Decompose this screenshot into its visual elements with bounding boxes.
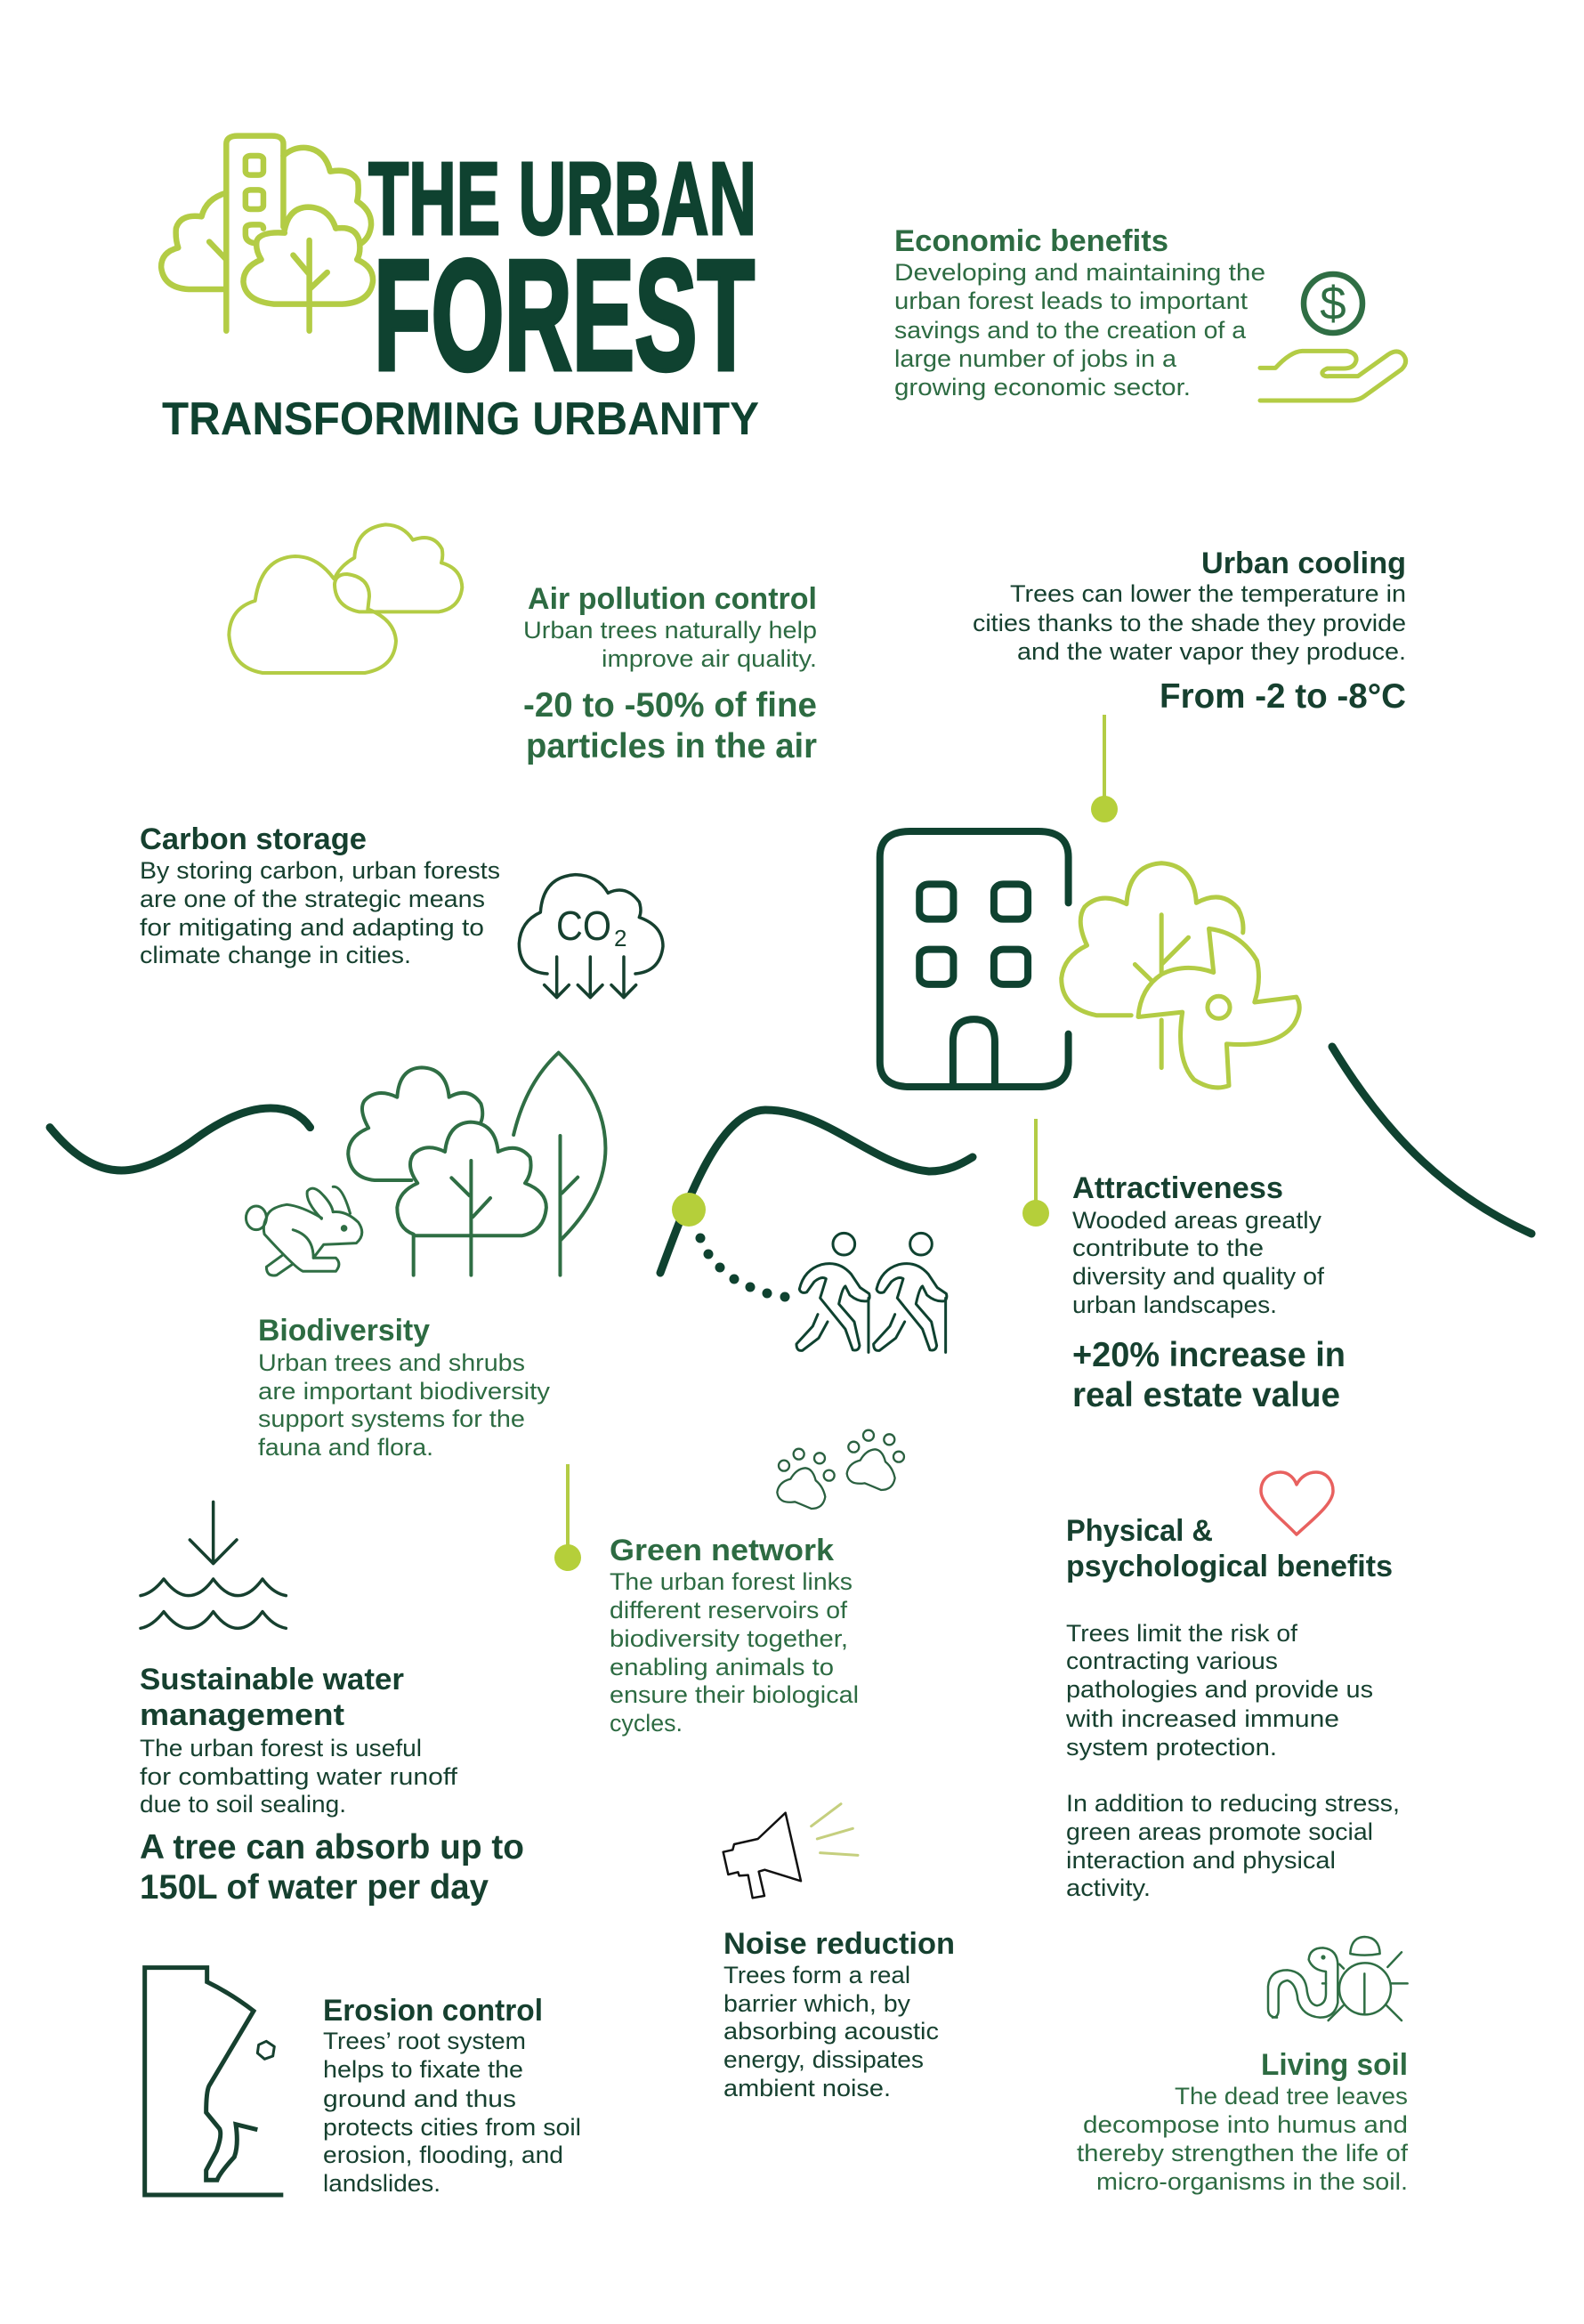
icon: water with arrow — [141, 1502, 286, 1628]
panel: attractiveness — [1072, 1171, 1346, 1414]
panel: urban cooling — [973, 547, 1406, 716]
icon: logo building and trees — [161, 136, 373, 331]
panel: urban cooling: cities thanks to the shade they provide — [973, 610, 1406, 636]
icon: paw prints — [777, 1430, 904, 1509]
panel: physical and psychological benefits: Trees limit the risk of — [1066, 1620, 1298, 1647]
panel: living soil — [1077, 2048, 1409, 2195]
panel: biodiversity — [258, 1314, 551, 1461]
icon: trees — [348, 1053, 605, 1275]
panel: biodiversity: Urban trees and shrubs — [258, 1349, 525, 1376]
icon: coin and hand: $ — [1320, 278, 1346, 330]
panel: economic benefits: Developing and maintaining the — [894, 259, 1265, 286]
panel: green network: cycles. — [610, 1710, 683, 1737]
panel: economic benefits: growing economic sector. — [894, 374, 1191, 401]
panel: economic benefits: Economic benefits — [894, 224, 1168, 258]
panel: physical and psychological benefits: with increased immune — [1065, 1705, 1339, 1732]
panel: attractiveness: contribute to the — [1072, 1235, 1264, 1261]
panel: carbon storage: for mitigating and adapting to — [140, 914, 484, 941]
panel: physical and psychological benefits: system protection. — [1066, 1734, 1277, 1761]
panel: urban cooling: Trees can lower the temperature in — [1010, 580, 1406, 607]
title: FOREST — [374, 227, 755, 403]
icon: worm and beetle — [1268, 1937, 1408, 2020]
panel: sustainable water management: management — [140, 1698, 344, 1732]
icon: building — [880, 831, 1069, 1087]
panel: attractiveness: urban landscapes. — [1072, 1292, 1277, 1318]
panel: noise reduction: Noise reduction — [723, 1927, 955, 1961]
panel: air pollution control: -20 to -50% of fine — [523, 686, 817, 725]
title: TRANSFORMING URBANITY — [162, 393, 759, 445]
panel: erosion control — [323, 1994, 581, 2197]
panel: biodiversity: fauna and flora. — [258, 1434, 433, 1461]
panel: physical and psychological benefits: In addition to reducing stress, — [1066, 1790, 1400, 1817]
panel: sustainable water management: due to soil sealing. — [140, 1791, 346, 1818]
panel: economic benefits: large number of jobs in a — [894, 345, 1177, 372]
panel: green network: biodiversity together, — [610, 1625, 848, 1652]
panel: living soil: Living soil — [1261, 2048, 1408, 2082]
icon: clouds — [229, 524, 462, 673]
icon: CO2 cloud: CO — [556, 903, 611, 949]
icon: coin and hand — [1260, 274, 1406, 401]
panel: erosion control: Trees’ root system — [323, 2028, 526, 2054]
panel: green network: different reservoirs of — [610, 1597, 848, 1624]
panel: green network: ensure their biological — [610, 1681, 859, 1708]
panel: attractiveness: +20% increase in — [1072, 1336, 1346, 1374]
panel: living soil: The dead tree leaves — [1175, 2083, 1408, 2109]
panel: living soil: decompose into humus and — [1083, 2111, 1408, 2138]
panel: erosion control: ground and thus — [323, 2085, 516, 2112]
title: THE URBAN — [368, 141, 756, 256]
marker: cooling pin — [1091, 715, 1118, 822]
panel: sustainable water management: Sustainable water — [140, 1663, 404, 1696]
panel: physical and psychological benefits: pathologies and provide us — [1066, 1676, 1373, 1703]
panel: erosion control: helps to fixate the — [323, 2056, 523, 2083]
panel: living soil: micro-organisms in the soil. — [1096, 2168, 1408, 2195]
panel: noise reduction: energy, dissipates — [723, 2046, 924, 2073]
hill curve middle — [660, 1110, 973, 1273]
panel: urban cooling: From -2 to -8°C — [1160, 677, 1406, 716]
icon: heart — [1261, 1472, 1333, 1534]
panel: physical and psychological benefits: interaction and physical — [1066, 1847, 1336, 1874]
panel: biodiversity: are important biodiversity — [258, 1378, 551, 1405]
panel: air pollution control: Air pollution control — [528, 582, 817, 616]
panel: erosion control: landslides. — [323, 2170, 440, 2197]
panel: noise reduction: Trees form a real — [723, 1962, 910, 1988]
panel: carbon storage: Carbon storage — [140, 822, 367, 856]
panel: biodiversity: Biodiversity — [258, 1314, 430, 1348]
panel: physical and psychological benefits: green areas promote social — [1066, 1818, 1373, 1845]
title — [162, 141, 759, 445]
panel: urban cooling: Urban cooling — [1201, 547, 1406, 580]
panel: physical and psychological benefits: contracting various — [1066, 1648, 1278, 1674]
panel: carbon storage: are one of the strategic means — [140, 886, 485, 912]
panel: noise reduction: barrier which, by — [723, 1990, 911, 2017]
icon: CO2 cloud: 2 — [614, 925, 626, 951]
panel: economic benefits: savings and to the creation of a — [894, 317, 1247, 344]
panel: noise reduction: absorbing acoustic — [723, 2018, 939, 2045]
hill curve right — [1332, 1047, 1531, 1234]
panel: sustainable water management: 150L of water per day — [140, 1868, 489, 1907]
panel: erosion control: erosion, flooding, and — [323, 2142, 563, 2168]
panel: carbon storage — [140, 822, 500, 968]
icon: tree and pinwheel — [1062, 863, 1299, 1088]
panel: air pollution control: particles in the air — [526, 727, 817, 765]
panel: erosion control: protects cities from soil — [323, 2114, 581, 2141]
icon: rabbit — [246, 1186, 362, 1275]
panel: air pollution control: Urban trees naturally help — [523, 617, 817, 644]
marker: attractiveness pin — [1022, 1119, 1049, 1227]
panel: air pollution control: improve air quality. — [602, 645, 817, 672]
panel: carbon storage: climate change in cities. — [140, 942, 411, 968]
panel: air pollution control — [523, 582, 817, 765]
icon: CO2 cloud — [519, 875, 663, 998]
panel: living soil: thereby strengthen the life of — [1077, 2140, 1409, 2166]
panel: noise reduction — [723, 1927, 955, 2101]
panel: economic benefits: urban forest leads to important — [894, 287, 1249, 314]
panel: green network: Green network — [610, 1534, 834, 1567]
panel: economic benefits — [894, 224, 1265, 401]
panel: sustainable water management: The urban forest is useful — [140, 1735, 422, 1761]
panel: physical and psychological benefits: Physical & — [1066, 1514, 1213, 1548]
panel: erosion control: Erosion control — [323, 1994, 543, 2028]
panel: attractiveness: real estate value — [1072, 1376, 1340, 1414]
panel: carbon storage: By storing carbon, urban forests — [140, 857, 500, 884]
icon: megaphone — [723, 1804, 858, 1898]
panel: sustainable water management — [140, 1663, 524, 1907]
panel: green network: enabling animals to — [610, 1654, 834, 1680]
panel: sustainable water management: for combatting water runoff — [140, 1763, 458, 1790]
panel: urban cooling: and the water vapor they produce. — [1017, 638, 1406, 665]
panel: green network — [610, 1534, 859, 1737]
hill curve left — [50, 1108, 311, 1170]
panel: biodiversity: support systems for the — [258, 1405, 525, 1432]
panel: sustainable water management: A tree can absorb up to — [140, 1828, 524, 1866]
marker: green network pin — [554, 1464, 581, 1571]
panel: physical and psychological benefits: activity. — [1066, 1875, 1151, 1901]
icon: eroded soil profile — [145, 1968, 283, 2195]
panel: attractiveness: Wooded areas greatly — [1072, 1207, 1322, 1234]
icon: hikers with dotted path — [672, 1193, 947, 1352]
panel: physical and psychological benefits: psychological benefits — [1066, 1550, 1393, 1583]
panel: attractiveness: diversity and quality of — [1072, 1263, 1325, 1290]
panel: attractiveness: Attractiveness — [1072, 1171, 1283, 1205]
panel: physical and psychological benefits — [1065, 1514, 1400, 1901]
panel: noise reduction: ambient noise. — [723, 2075, 891, 2101]
panel: green network: The urban forest links — [610, 1568, 853, 1595]
